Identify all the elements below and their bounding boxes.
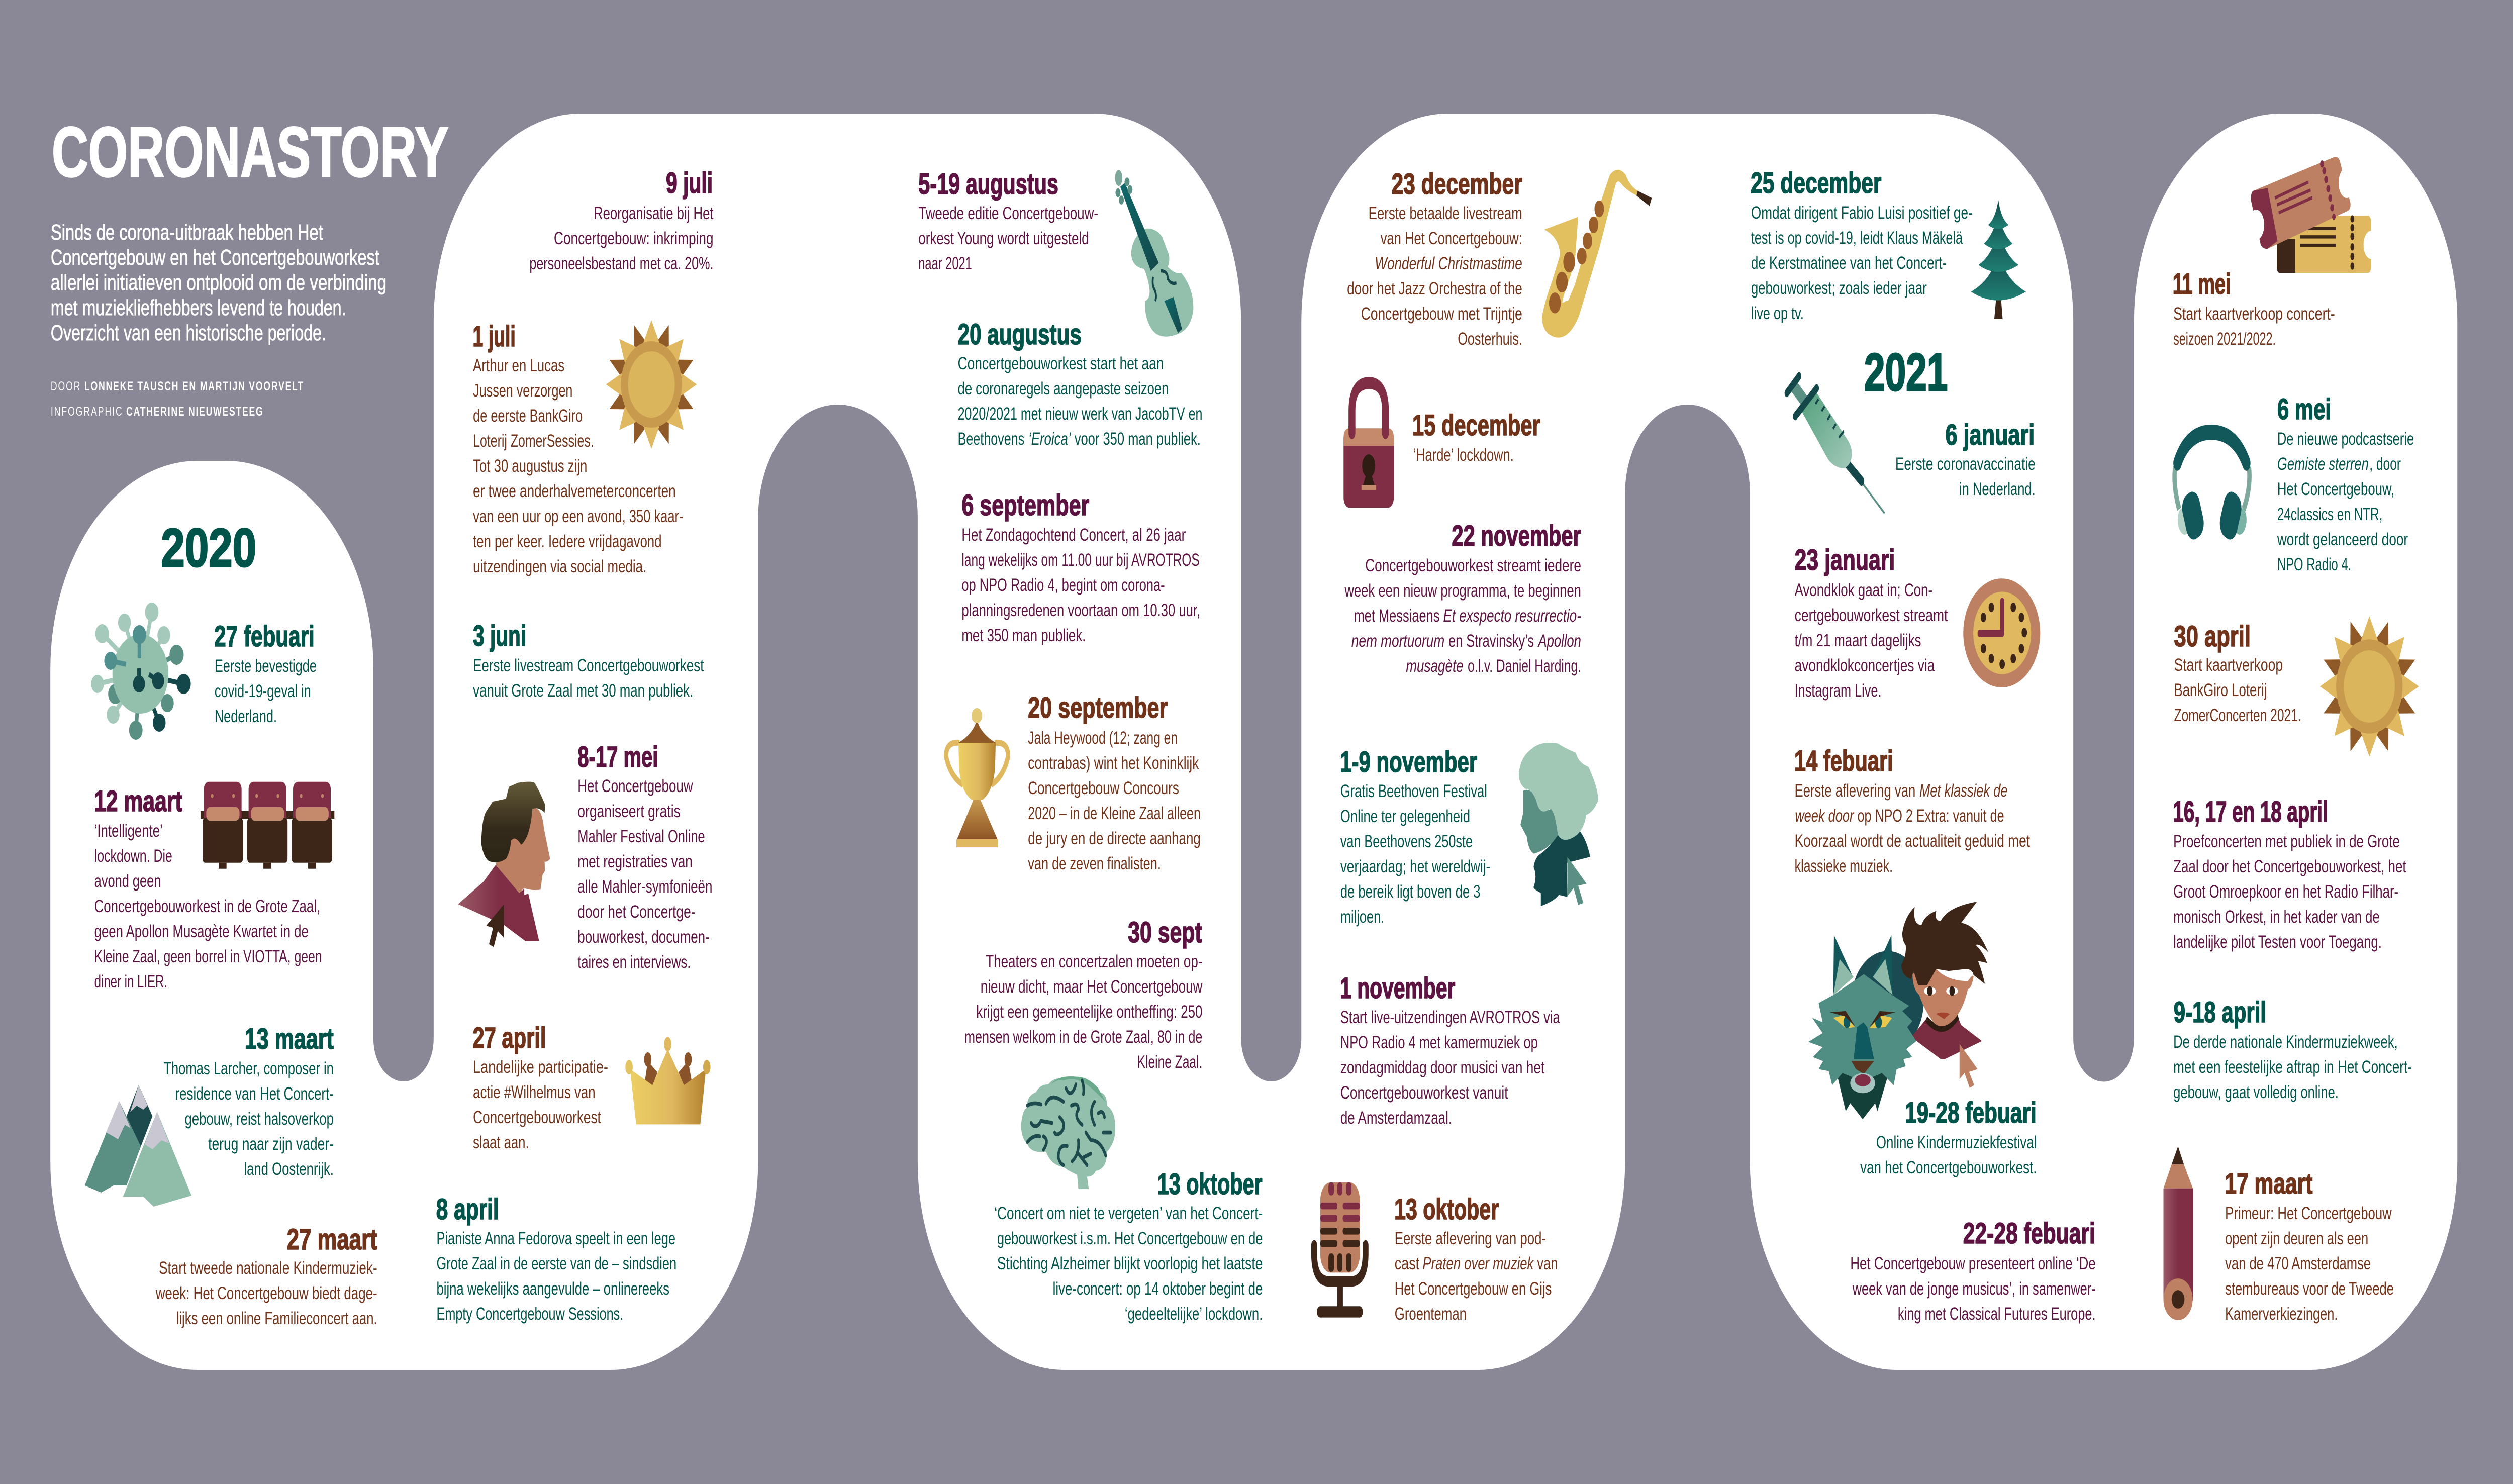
event: 12 maart: geen Apollon Musagète Kwartet in de [94, 922, 309, 941]
event: 20 augustus: de coronaregels aangepaste seizoen [958, 379, 1169, 399]
event: 1 juli: er twee anderhalvemeterconcerten [473, 482, 676, 501]
event: 9 juli: Reorganisatie bij Het [594, 204, 714, 223]
event: 1-9 november: de bereik ligt boven de 3 [1340, 882, 1481, 902]
event: 23 december: van Het Concertgebouw: [1381, 229, 1522, 248]
intro text: Sinds de corona-uitbraak hebben Het [51, 221, 323, 245]
event: 20 september: 2020 – in de Kleine Zaal alleen [1028, 804, 1201, 823]
event: 8 april [436, 1193, 676, 1324]
event: 8-17 mei: 8-17 mei [577, 741, 658, 773]
event: 17 maart: opent zijn deuren als een [2225, 1229, 2368, 1248]
event: 9-18 april: gebouw, gaat volledig online. [2173, 1083, 2339, 1102]
event: 14 febuari [1794, 745, 2031, 876]
event: 20 augustus: Concertgebouworkest start het aan [958, 354, 1164, 373]
event: 30 april: ZomerConcerten 2021. [2174, 706, 2301, 725]
event: 6 mei: NPO Radio 4. [2277, 555, 2351, 574]
event: 1-9 november: verjaardag; het wereldwij- [1340, 857, 1490, 876]
event: 25 december [1751, 167, 1973, 323]
event: 20 augustus: voor 350 man publiek. [1075, 430, 1201, 449]
event: 6 mei: Gemiste sterren [2277, 455, 2369, 474]
event: 22 november: week een nieuw programma, te beginnen [1344, 581, 1581, 601]
icon: violin [1115, 170, 1193, 337]
event: 8-17 mei: bouworkest, documen- [577, 928, 710, 947]
intro text: Concertgebouw en het Concertgebouworkest [51, 246, 379, 270]
event: 17 maart: 17 maart [2225, 1167, 2313, 1200]
intro text: met muziekliefhebbers levend te houden. [51, 296, 346, 320]
event: 23 december: Concertgebouw met Trijntje [1361, 305, 1522, 324]
event: 20 augustus: ‘Eroica’ [1028, 430, 1072, 449]
event: 27 april: Landelijke participatie- [473, 1058, 608, 1077]
event: 1 juli: Arthur en Lucas [473, 356, 564, 375]
icon: christmas tree [1971, 200, 2026, 319]
event: 27 maart: week: Het Concertgebouw biedt dage- [155, 1284, 377, 1303]
event: 3 juni [473, 620, 704, 701]
event: 6 september: 6 september [961, 489, 1089, 522]
event: 19-28 febuari: van het Concertgebouworkest. [1860, 1158, 2037, 1177]
event: 22-28 febuari: king met Classical Futures Europe. [1898, 1305, 2096, 1324]
event: 1 juli: ten per keer. Iedere vrijdagavond [473, 532, 661, 551]
event: 25 december: Omdat dirigent Fabio Luisi positief ge- [1751, 204, 1973, 223]
event: 30 sept: Kleine Zaal. [1137, 1053, 1202, 1072]
event: 11 mei: 11 mei [2173, 268, 2231, 301]
event: 12 maart: Concertgebouworkest in de Grote Zaal, [94, 897, 320, 916]
event: 12 maart: Kleine Zaal, geen borrel in VIOTTA, geen [94, 947, 322, 966]
event: 23 januari [1795, 544, 1948, 701]
event: 9 juli: Concertgebouw: inkrimping [554, 229, 714, 248]
event: 25 december: gebouworkest; zoals ieder jaar [1751, 279, 1927, 298]
event: 14 febuari: klassieke muziek. [1795, 857, 1893, 876]
event: 27 febuari: covid-19-geval in [215, 682, 311, 701]
icon: clock [1963, 578, 2040, 687]
event: 6 mei: , door [2369, 455, 2401, 474]
icon: concert seats [201, 782, 334, 869]
event: 1 november [1340, 972, 1560, 1128]
event: 13 oktober (bruin): Het Concertgebouw en Gijs [1395, 1279, 1552, 1299]
event: 12 maart: 12 maart [94, 785, 182, 818]
event: 22-28 febuari [1850, 1217, 2096, 1324]
event: 15 december: ‘Harde’ lockdown. [1413, 446, 1514, 465]
event: 20 september: 20 september [1028, 691, 1168, 724]
event: 22 november: en Stravinsky’s [1448, 632, 1534, 651]
event: 3 juni: 3 juni [473, 620, 526, 652]
event: 8-17 mei: taires en interviews. [577, 953, 691, 972]
event: 5-19 augustus: naar 2021 [918, 254, 972, 273]
event: 27 april: 27 april [472, 1022, 546, 1054]
event: 22 november: 22 november [1452, 520, 1581, 552]
event: 30 sept [964, 916, 1203, 1072]
icon: headphones [2175, 432, 2250, 544]
icon: wolf and boy [1808, 902, 1988, 1119]
event: 12 maart: ‘Intelligente’ [94, 822, 163, 841]
event: 30 april: Start kaartverkoop [2174, 656, 2283, 675]
event: 3 juni: Eerste livestream Concertgebouworkest [473, 656, 704, 675]
event: 14 febuari: week door [1795, 807, 1855, 826]
event: 6 mei: 24classics en NTR, [2277, 505, 2382, 524]
event: 27 maart [155, 1223, 377, 1328]
icon: crown [625, 1037, 711, 1124]
event: 11 mei: Start kaartverkoop concert- [2173, 305, 2335, 324]
event: 9-18 april: met een feestelijke aftrap in Het Concert- [2173, 1058, 2412, 1077]
event: 22-28 febuari: 22-28 febuari [1963, 1217, 2095, 1250]
event: 27 febuari: Nederland. [215, 707, 277, 726]
credits: CATHERINE NIEUWESTEEG [126, 404, 263, 419]
event: 1 november: 1 november [1340, 972, 1455, 1005]
event: 16, 17 en 18 april: Zaal door het Concertgebouworkest, het [2173, 857, 2406, 876]
event: 6 mei: Het Concertgebouw, [2277, 480, 2394, 499]
event: 1 juli: Tot 30 augustus zijn [473, 457, 587, 476]
event: 12 maart [94, 785, 322, 992]
event: 27 maart: lijks een online Familieconcert aan. [176, 1309, 377, 1328]
event: 23 januari: avondklokconcertjes via [1795, 656, 1935, 675]
event: 19-28 febuari: Online Kindermuziekfestival [1876, 1133, 2037, 1152]
event: 11 mei [2173, 268, 2335, 349]
event: 30 sept: Theaters en concertzalen moeten op- [986, 952, 1202, 971]
event: 22 november: Concertgebouworkest streamt iedere [1365, 556, 1581, 575]
event: 25 december: live op tv. [1751, 304, 1804, 323]
event: 27 april: actie #Wilhelmus van [473, 1083, 596, 1102]
event: 22 november: nem mortuorum [1351, 632, 1444, 651]
event: 23 december: Eerste betaalde livestream [1369, 204, 1522, 223]
event: 30 april: BankGiro Loterij [2174, 681, 2267, 700]
event: 13 oktober (bruin) [1394, 1193, 1558, 1324]
event: 17 maart: Primeur: Het Concertgebouw [2225, 1204, 2392, 1223]
icon: brain [1021, 1076, 1115, 1189]
event: 13 oktober (groen): live-concert: op 14 oktober begint de [1053, 1279, 1263, 1299]
event: 1-9 november: van Beethovens 250ste [1340, 832, 1473, 851]
icon: sun 2 [2320, 616, 2419, 757]
icon: virus [91, 603, 191, 740]
event: 23 januari: certgebouworkest streamt [1795, 606, 1948, 625]
event: 27 maart: Start tweede nationale Kindermuziek- [159, 1259, 377, 1278]
event: 17 maart [2225, 1167, 2394, 1324]
icon: padlock [1343, 383, 1394, 508]
icon: pencil [2164, 1146, 2193, 1320]
event: 14 febuari: 14 febuari [1794, 745, 1893, 777]
event: 27 april: slaat aan. [473, 1133, 529, 1152]
event: 17 maart: van de 470 Amsterdamse [2225, 1254, 2371, 1273]
event: 13 oktober (bruin): cast [1395, 1254, 1420, 1273]
event: 20 september [1028, 691, 1201, 873]
event: 14 febuari: op NPO 2 Extra: vanuit de [1857, 807, 2004, 826]
event: 22 november: o.l.v. Daniel Harding. [1468, 657, 1581, 676]
event: 13 oktober (bruin): Groenteman [1395, 1305, 1467, 1324]
event: 20 september: Jala Heywood (12; zang en [1028, 729, 1178, 748]
event: 1 november: Start live-uitzendingen AVROTROS via [1340, 1008, 1560, 1027]
event: 27 maart: 27 maart [287, 1223, 377, 1256]
event: 17 maart: stembureaus voor de Tweede [2225, 1279, 2394, 1299]
event: 9 juli: personeelsbestand met ca. 20%. [529, 254, 714, 273]
event: 13 maart: gebouw, reist halsoverkop [185, 1110, 334, 1129]
event: 23 december [1347, 168, 1522, 349]
event: 6 januari: 6 januari [1945, 419, 2035, 451]
event: 13 maart [163, 1023, 334, 1179]
icon: tickets [2248, 157, 2378, 273]
event: 12 maart: lockdown. Die [94, 847, 172, 866]
event: 22-28 febuari: week van de jonge musicus’, in samenwer- [1852, 1279, 2096, 1299]
event: 22-28 febuari: Het Concertgebouw presenteert online ‘De [1850, 1254, 2096, 1273]
event: 14 febuari: Met klassiek de [1919, 781, 2008, 801]
event: 1 juli: van een uur op een avond, 350 kaar- [473, 507, 684, 526]
event: 8 april: Grote Zaal in de eerste van de – sindsdien [436, 1254, 676, 1273]
event: 1-9 november: Gratis Beethoven Festival [1340, 782, 1487, 801]
event: 1 juli: uitzendingen via social media. [473, 557, 646, 576]
credits: DOOR [51, 379, 80, 393]
event: 5-19 augustus: 5-19 augustus [918, 168, 1058, 201]
event: 6 september: Het Zondagochtend Concert, al 26 jaar [961, 526, 1186, 545]
event: 20 september: van de zeven finalisten. [1028, 854, 1161, 873]
event: 1 juli: de eerste BankGiro [473, 407, 583, 426]
icon: syringe [1787, 376, 1885, 513]
event: 20 augustus: 20 augustus [958, 318, 1082, 351]
event: 8-17 mei: door het Concertge- [577, 903, 696, 922]
event: 22 november: musagète [1406, 657, 1464, 676]
event: 13 maart: Thomas Larcher, composer in [163, 1059, 334, 1078]
title: CORONASTORY [52, 113, 448, 191]
event: 12 maart: avond geen [94, 872, 161, 891]
event: 13 oktober (bruin): 13 oktober [1394, 1193, 1499, 1226]
event: 6 september: lang wekelijks om 11.00 uur bij AVROTROS [961, 551, 1200, 570]
event: 20 september: de jury en de directe aanhang [1028, 829, 1201, 848]
event: 1-9 november: Online ter gelegenheid [1340, 807, 1470, 826]
event: 30 april: 30 april [2174, 620, 2251, 653]
event: 1-9 november: 1-9 november [1340, 746, 1477, 778]
event: 6 mei: 6 mei [2277, 393, 2331, 426]
icon: mountains [85, 1085, 191, 1207]
intro text: Overzicht van een historische periode. [51, 321, 326, 345]
event: 30 sept: mensen welkom in de Grote Zaal, 80 in de [964, 1028, 1202, 1047]
year heading 2021: 2021 [1864, 343, 1948, 402]
event: 15 december [1412, 409, 1540, 465]
event: 25 december: 25 december [1751, 167, 1881, 200]
event: 6 september: met 350 man publiek. [961, 626, 1086, 645]
event: 23 januari: Avondklok gaat in; Con- [1795, 581, 1932, 600]
event: 1 juli: Loterij ZomerSessies. [473, 432, 594, 451]
event: 27 febuari: Eerste bevestigde [215, 657, 317, 676]
event: 8-17 mei: met registraties van [577, 852, 693, 871]
event: 23 januari: t/m 21 maart dagelijks [1795, 631, 1921, 650]
event: 30 sept: nieuw dicht, maar Het Concertgebouw [981, 977, 1203, 997]
event: 1 juli: 1 juli [472, 320, 516, 353]
event: 8-17 mei: alle Mahler-symfonieën [577, 877, 712, 897]
event: 5-19 augustus: Tweede editie Concertgebouw- [918, 204, 1098, 223]
event: 6 mei: De nieuwe podcastserie [2277, 430, 2414, 449]
event: 8 april: Pianiste Anna Fedorova speelt in een lege [436, 1229, 675, 1248]
event: 1 november: NPO Radio 4 met kamermuziek op [1340, 1033, 1538, 1052]
event: 13 oktober (bruin): Eerste aflevering van pod- [1395, 1229, 1546, 1248]
event: 22 november [1344, 520, 1581, 676]
icon: trophy [946, 708, 1008, 847]
event: 22 november: Et exspecto resurrectio- [1443, 607, 1581, 626]
event: 13 oktober (bruin): van [1537, 1254, 1558, 1273]
event: 16, 17 en 18 april [2173, 796, 2406, 952]
event: 9 juli [529, 167, 714, 273]
event: 16, 17 en 18 april: Proefconcerten met publiek in de Grote [2173, 832, 2400, 851]
credits [51, 379, 303, 419]
event: 9-18 april: 9-18 april [2174, 996, 2266, 1029]
event: 20 augustus: Beethovens [958, 430, 1024, 449]
event: 22 november: Apollon [1537, 632, 1581, 651]
event: 13 oktober (groen): ‘Concert om niet te vergeten’ van het Concert- [994, 1204, 1263, 1223]
event: 30 sept: krijgt een gemeentelijke ontheffing: 250 [976, 1003, 1202, 1022]
event: 13 oktober (groen): ‘gedeeltelijke’ lockdown. [1125, 1305, 1263, 1324]
icon: microphone [1314, 1182, 1366, 1318]
event: 13 maart: land Oostenrijk. [244, 1160, 334, 1179]
event: 16, 17 en 18 april: landelijke pilot Testen voor Toegang. [2173, 933, 2382, 952]
event: 8-17 mei [577, 741, 712, 972]
event: 6 september: planningsredenen voortaan om 10.30 uur, [961, 601, 1200, 620]
event: 1 november: zondagmiddag door musici van het [1340, 1058, 1545, 1077]
event: 1 november: Concertgebouworkest vanuit [1340, 1083, 1508, 1103]
event: 23 januari: 23 januari [1795, 544, 1895, 576]
event: 20 september: contrabas) wint het Koninklijk [1028, 754, 1199, 773]
event: 8-17 mei: Het Concertgebouw [577, 777, 693, 796]
event: 6 januari [1895, 419, 2036, 499]
event: 22 november: met Messiaens [1354, 607, 1439, 626]
event: 9-18 april: De derde nationale Kindermuziekweek, [2173, 1033, 2398, 1052]
intro text [51, 221, 386, 345]
event: 6 mei: wordt gelanceerd door [2277, 530, 2408, 549]
event: 17 maart: Kamerverkiezingen. [2225, 1305, 2338, 1324]
event: 8-17 mei: organiseert gratis [577, 802, 681, 821]
event: 20 september: Concertgebouw Concours [1028, 779, 1179, 798]
event: 9 juli: 9 juli [666, 167, 713, 200]
intro text: allerlei initiatieven ontplooid om de verbinding [51, 271, 386, 295]
event: 1 juli: Jussen verzorgen [473, 381, 572, 401]
event: 3 juni: vanuit Grote Zaal met 30 man publiek. [473, 681, 693, 701]
year heading 2020: 2020 [161, 517, 256, 578]
event: 27 april [472, 1022, 608, 1152]
event: 27 febuari: 27 febuari [214, 620, 315, 653]
event: 11 mei: seizoen 2021/2022. [2173, 330, 2276, 349]
event: 13 oktober (groen): 13 oktober [1157, 1168, 1263, 1201]
event: 8 april: Empty Concertgebouw Sessions. [436, 1305, 623, 1324]
event: 20 augustus: 2020/2021 met nieuw werk van JacobTV en [958, 405, 1202, 424]
event: 16, 17 en 18 april: Groot Omroepkoor en het Radio Filhar- [2173, 882, 2398, 902]
event: 16, 17 en 18 april: 16, 17 en 18 april [2173, 796, 2328, 828]
event: 6 september: op NPO Radio 4, begint om corona- [961, 576, 1165, 595]
event: 6 januari: in Nederland. [1959, 480, 2036, 499]
event: 16, 17 en 18 april: monisch Orkest, in het kader van de [2173, 908, 2380, 927]
event: 19-28 febuari: 19-28 febuari [1905, 1097, 2037, 1129]
event: 23 december: Oosterhuis. [1458, 330, 1522, 349]
icon: Mahler portrait with cursor [458, 782, 550, 947]
event: 30 sept: 30 sept [1128, 916, 1202, 949]
event: 23 januari: Instagram Live. [1795, 681, 1881, 701]
icon: Beethoven portrait with cursor [1519, 743, 1598, 906]
event: 8 april: 8 april [436, 1193, 499, 1226]
event: 1 juli [472, 320, 684, 576]
event: 1-9 november: miljoen. [1340, 908, 1384, 927]
event: 13 oktober (groen): Stichting Alzheimer blijkt voorlopig het laatste [997, 1254, 1263, 1273]
credits: INFOGRAPHIC [51, 404, 122, 419]
event: 13 maart: 13 maart [245, 1023, 334, 1055]
event: 12 maart: diner in LIER. [94, 972, 167, 992]
event: 6 januari: Eerste coronavaccinatie [1895, 455, 2036, 474]
event: 9-18 april [2173, 996, 2412, 1102]
event: 13 oktober (groen): gebouworkest i.s.m. Het Concertgebouw en de [997, 1229, 1263, 1248]
event: 23 december: 23 december [1391, 168, 1522, 201]
event: 1 november: de Amsterdamzaal. [1340, 1109, 1452, 1128]
event: 15 december: 15 december [1412, 409, 1540, 442]
icon: sun [606, 320, 697, 449]
event: 13 maart: terug naar zijn vader- [208, 1135, 334, 1154]
event: 20 augustus [958, 318, 1202, 449]
event: 27 febuari [214, 620, 317, 726]
event: 25 december: test is op covid-19, leidt Klaus Mäkelä [1751, 229, 1963, 248]
event: 19-28 febuari [1860, 1097, 2037, 1177]
event: 8 april: bijna wekelijks aangevulde – onlinereeks [436, 1279, 669, 1299]
event: 6 mei [2277, 393, 2414, 574]
event: 13 oktober (groen) [994, 1168, 1263, 1324]
event: 27 april: Concertgebouworkest [473, 1108, 601, 1127]
event: 14 febuari: Koorzaal wordt de actualiteit geduid met [1795, 832, 2031, 851]
event: 13 oktober (bruin): Praten over muziek [1423, 1254, 1534, 1273]
credits: LONNEKE TAUSCH EN MARTIJN VOORVELT [84, 379, 303, 393]
event: 23 december: Wonderful Christmastime [1375, 254, 1522, 273]
event: 25 december: de Kerstmatinee van het Concert- [1751, 254, 1947, 273]
event: 13 maart: residence van Het Concert- [175, 1084, 334, 1104]
event: 6 september [961, 489, 1200, 645]
event: 30 april [2174, 620, 2301, 725]
event: 8-17 mei: Mahler Festival Online [577, 827, 705, 846]
event: 1-9 november [1340, 746, 1490, 927]
event: 14 febuari: Eerste aflevering van [1795, 781, 1915, 801]
event: 23 december: door het Jazz Orchestra of the [1347, 279, 1522, 299]
event: 5-19 augustus: orkest Young wordt uitgesteld [918, 229, 1089, 248]
icon: saxophone [1542, 170, 1652, 338]
event: 5-19 augustus [918, 168, 1098, 273]
